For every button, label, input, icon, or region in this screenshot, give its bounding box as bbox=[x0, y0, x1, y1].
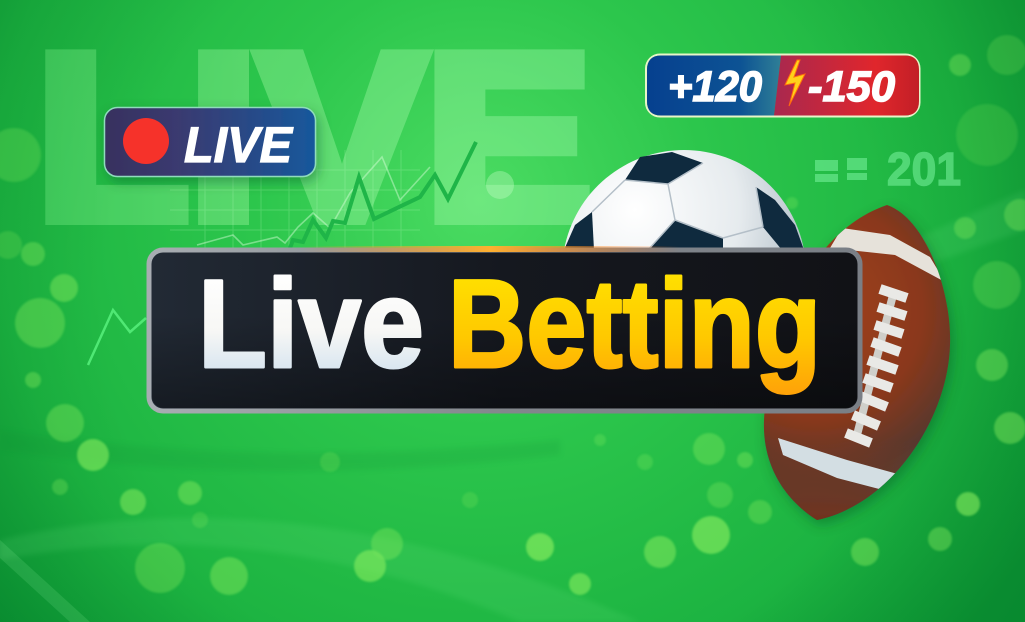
LIVE badge bbox=[104, 108, 316, 176]
LIVE label: LIVE bbox=[184, 117, 294, 173]
ghost score 201: 201 bbox=[887, 143, 961, 195]
odds badge bbox=[646, 54, 920, 116]
laces bbox=[846, 289, 907, 443]
main trend line bbox=[290, 142, 476, 248]
red live dot bbox=[123, 118, 169, 164]
+120: +120 bbox=[668, 63, 762, 111]
ball seams bbox=[592, 163, 763, 250]
bottom stripe bbox=[778, 438, 905, 490]
line chart bbox=[88, 142, 476, 365]
lightning bolt bbox=[785, 60, 805, 106]
title banner bbox=[149, 246, 860, 411]
orange glow on top edge bbox=[300, 246, 680, 252]
title: Betting: Betting bbox=[448, 255, 821, 394]
ball patches bbox=[564, 152, 804, 250]
soccer ball bbox=[564, 150, 804, 250]
red odds segment bbox=[774, 56, 919, 116]
ghost score 201 bbox=[815, 143, 961, 195]
ghost bubble bbox=[486, 171, 514, 199]
-150: -150 bbox=[808, 63, 895, 111]
chart grid bbox=[170, 150, 420, 250]
blue odds segment bbox=[647, 56, 781, 116]
top stripe bbox=[830, 228, 945, 282]
lower left trend line bbox=[88, 310, 146, 365]
title: Live: Live bbox=[198, 255, 424, 394]
american football bbox=[764, 205, 950, 520]
ghost LIVE background lettering: LIVE bbox=[36, 5, 592, 268]
faint white trend line bbox=[197, 157, 430, 245]
